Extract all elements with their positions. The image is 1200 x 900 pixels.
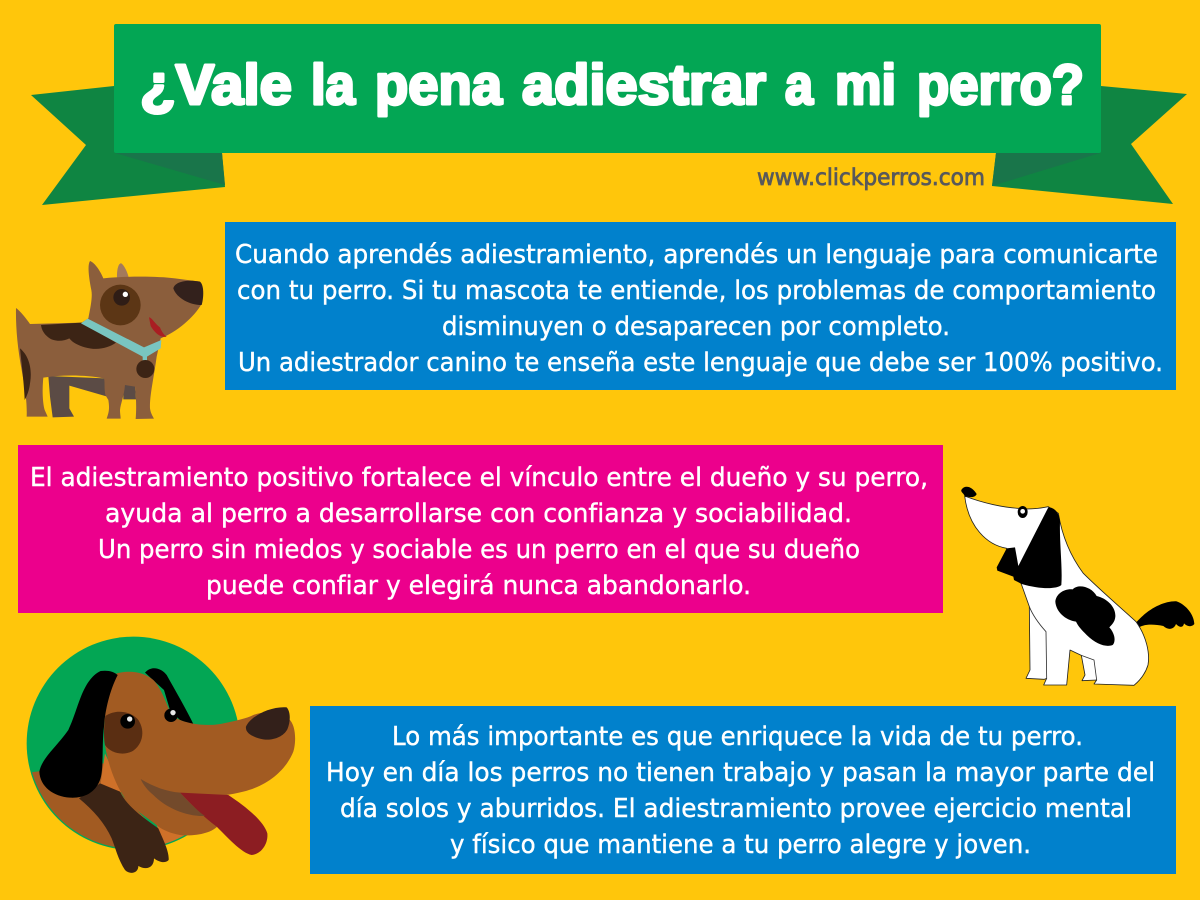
illustration: brown dog in green circle [23, 637, 295, 873]
title: mi [835, 53, 896, 117]
left ribbon tail [31, 86, 225, 205]
right ribbon tail [992, 86, 1187, 204]
panel: pink text: El adiestramiento positivo fortalece el vínculo entre el dueño y su perro, [30, 463, 928, 493]
illustration: black and white dog [961, 487, 1194, 685]
panel: pink text: Un perro sin miedos y sociable es un perro en el que su dueño [98, 535, 860, 565]
panel: pink text: puede confiar y elegirá nunca abandonarlo. [206, 571, 751, 601]
banner panel [114, 24, 1101, 153]
panel: blue text 1: disminuyen o desaparecen por completo. [442, 312, 950, 342]
panel: blue text 1: con tu perro. Si tu mascota te entiende, los problemas de comportamiento [237, 276, 1156, 306]
panel: blue text 1: Cuando aprendés adiestramiento, aprendés un lenguaje para comunicarte [235, 240, 1158, 270]
panel: blue text 2 [310, 706, 1176, 874]
title: pena [375, 53, 503, 117]
title: adiestrar [522, 53, 766, 117]
panel: pink text: ayuda al perro a desarrollarse con confianza y sociabilidad. [105, 499, 852, 529]
panel: blue text 2: y físico que mantiene a tu perro alegre y joven. [450, 830, 1031, 860]
panel: blue text 1 [225, 222, 1176, 390]
panel: blue text 2: día solos y aburridos. El adiestramiento provee ejercicio mental [340, 794, 1132, 824]
panel: blue text 2: Lo más importante es que enriquece la vida de tu perro. [392, 722, 1083, 752]
title: ¿Vale [140, 53, 292, 117]
panel: blue text 2: Hoy en día los perros no tienen trabajo y pasan la mayor parte del [326, 758, 1155, 788]
panel: blue text 1: Un adiestrador canino te enseña este lenguaje que debe ser 100% positivo. [238, 348, 1163, 378]
title [140, 53, 1084, 117]
title: a [785, 53, 814, 117]
title: la [311, 53, 356, 117]
title: perro? [917, 53, 1084, 117]
panel: pink text [18, 445, 943, 613]
website url: www.clickperros.com [757, 165, 985, 191]
illustration: brown dog [16, 261, 203, 419]
title banner [31, 24, 1187, 205]
